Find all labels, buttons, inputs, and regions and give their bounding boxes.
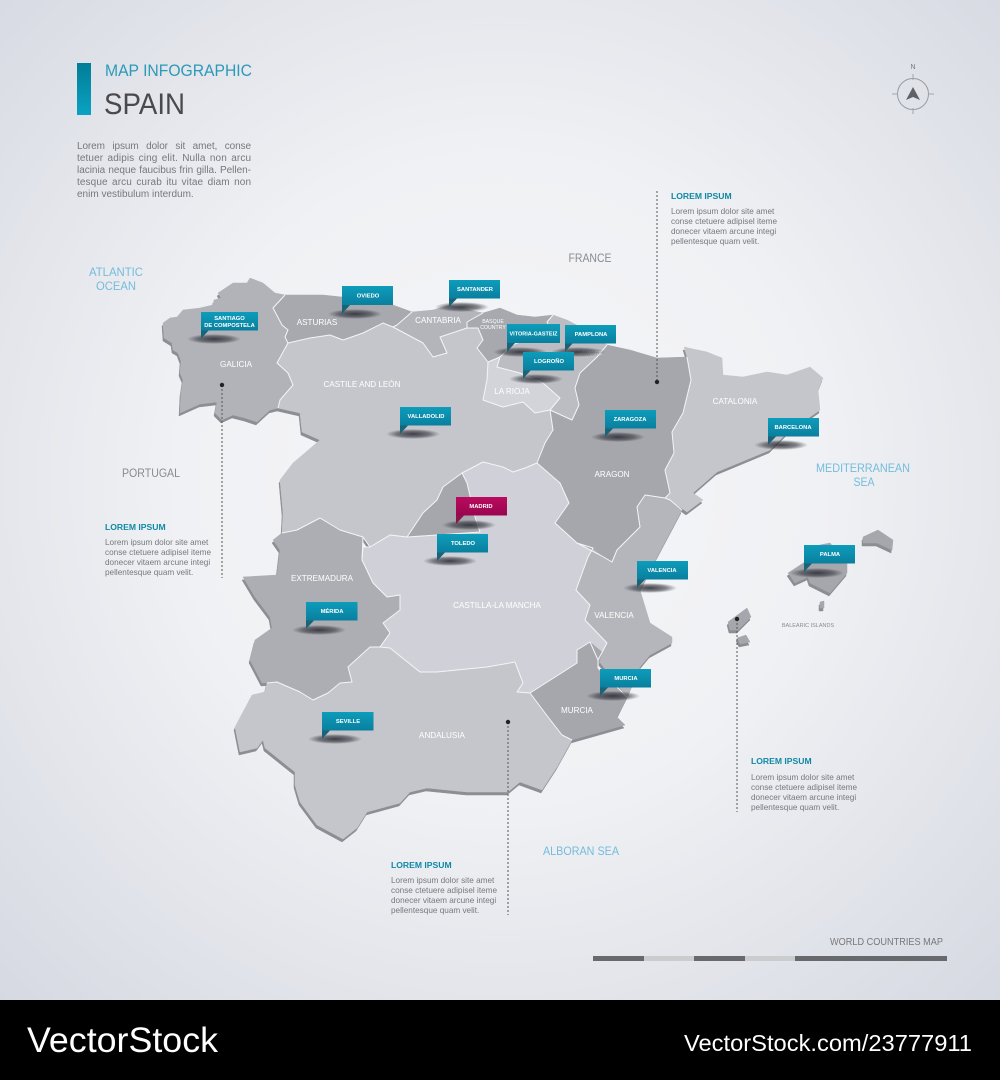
pin: Valladolid: VALLADOLID	[408, 414, 444, 420]
intro paragraph	[77, 141, 251, 200]
map of Spain	[163, 278, 893, 839]
pin: Oviedo: OVIEDO	[357, 294, 380, 300]
pin: Valladolid	[386, 407, 451, 439]
region labels: BASQUE	[482, 319, 504, 325]
pin: Santiago de Compostela	[187, 312, 258, 344]
icon: compass	[892, 64, 934, 114]
pin: Barcelona: BARCELONA	[774, 425, 812, 431]
callout: islands: LOREM IPSUM	[751, 756, 812, 766]
region: Murcia	[530, 642, 627, 740]
footer url: VectorStock.com/23777911	[684, 1030, 972, 1056]
callout: north-east	[655, 191, 777, 384]
callout: islands: Lorem ipsum dolor site amet	[751, 773, 855, 782]
region labels: CATALONIA	[713, 397, 758, 406]
region: Andalusia	[235, 647, 572, 839]
location pins	[187, 280, 855, 744]
pin: Oviedo	[328, 286, 393, 319]
pin: Zaragoza	[591, 410, 656, 442]
callout: north-east: conse ctetuere adipisel iteme	[671, 217, 777, 226]
callout: west: donecer vitaem arcune integi	[105, 558, 210, 567]
callout: south	[391, 720, 510, 915]
pin: Palma: PALMA	[820, 552, 841, 558]
region labels: LA RIOJA	[494, 387, 530, 396]
land regions	[163, 278, 893, 839]
pin: Seville: SEVILLE	[336, 719, 360, 725]
pin: Vitoria-Gasteiz: VITORIA-GASTEIZ	[510, 332, 558, 338]
region: Galicia	[163, 278, 293, 422]
pin: Valencia: VALENCIA	[647, 568, 677, 574]
callout: south: conse ctetuere adipisel iteme	[391, 886, 497, 895]
sea and country labels: ATLANTIC	[89, 267, 143, 279]
region: Asturias	[273, 295, 412, 343]
pin: Zaragoza: ZARAGOZA	[614, 417, 647, 423]
pin: Pamplona: PAMPLONA	[575, 332, 608, 338]
pin: Santander: SANTANDER	[457, 287, 494, 293]
intro paragraph: lacinia neque faucibus frin gilla. Pellen-	[77, 165, 251, 176]
callout: islands: pellentesque quam velit.	[751, 803, 839, 812]
footer band	[0, 1000, 1000, 1080]
pin: Toledo: TOLEDO	[451, 541, 476, 547]
intro paragraph: enim vestibulum interdum.	[77, 189, 194, 200]
pin: Merida	[292, 602, 358, 635]
sea and country labels	[89, 253, 910, 858]
callout: south: donecer vitaem arcune integi	[391, 896, 496, 905]
region labels: COUNTRY	[480, 325, 506, 331]
region labels: GALICIA	[220, 360, 253, 369]
pin: Madrid	[442, 497, 507, 530]
callout: south: pellentesque quam velit.	[391, 906, 479, 915]
region labels: VALENCIA	[594, 611, 634, 620]
region: Navarre	[497, 315, 607, 420]
sea and country labels: ALBORAN SEA	[543, 846, 619, 858]
region labels: ANDALUSIA	[419, 731, 466, 740]
callout: islands: conse ctetuere adipisel iteme	[751, 783, 857, 792]
pin: Santander	[435, 280, 500, 312]
region labels: ASTURIAS	[297, 318, 338, 327]
pin: Barcelona	[754, 418, 819, 450]
region: Ibiza	[728, 608, 751, 630]
callout: islands	[735, 617, 857, 812]
region: Valencia	[576, 495, 682, 697]
region: Formentera	[737, 635, 750, 644]
pin: Toledo	[423, 534, 488, 566]
pin: Valencia	[623, 561, 688, 593]
region: Aragon	[537, 345, 691, 562]
pin: Logrono: LOGROÑO	[534, 358, 564, 365]
callout: south: LOREM IPSUM	[391, 860, 452, 870]
region labels: CASTILLA-LA MANCHA	[453, 601, 541, 610]
sea and country labels: OCEAN	[96, 281, 136, 293]
pin: Murcia	[586, 669, 651, 701]
region: Extremadura	[243, 518, 400, 700]
scale bar	[593, 937, 947, 961]
region: Menorca	[863, 530, 893, 550]
callout: south: Lorem ipsum dolor site amet	[391, 876, 495, 885]
callout: west	[105, 383, 224, 578]
callout: west: pellentesque quam velit.	[105, 568, 193, 577]
callout: north-east: pellentesque quam velit.	[671, 237, 759, 246]
subtitle: MAP INFOGRAPHIC	[105, 62, 252, 80]
pin: Logrono	[509, 352, 574, 384]
region: Mallorca	[788, 543, 847, 593]
callout: islands: donecer vitaem arcune integi	[751, 793, 856, 802]
title: SPAIN	[104, 88, 185, 121]
intro paragraph: tesque arcu curab itu vitae diam non	[77, 177, 251, 188]
callout: north-east: LOREM IPSUM	[671, 191, 732, 201]
scale bar: WORLD COUNTRIES MAP	[830, 937, 943, 948]
sea and country labels: SEA	[854, 477, 875, 489]
callout: west: conse ctetuere adipisel iteme	[105, 548, 211, 557]
intro paragraph: Lorem ipsum dolor sit amet, conse	[77, 141, 251, 152]
title accent bar	[77, 63, 91, 115]
region: Basque Country	[467, 308, 553, 362]
region: Catalonia	[665, 347, 823, 512]
title block	[77, 62, 252, 121]
region: Cabrera	[820, 601, 824, 608]
region: Madrid	[407, 473, 480, 537]
region: Castilla-La Mancha	[362, 462, 607, 693]
sea and country labels: FRANCE	[568, 253, 612, 265]
region: La Rioja	[483, 357, 560, 413]
callout: north-east: Lorem ipsum dolor site amet	[671, 207, 775, 216]
region labels: MURCIA	[561, 706, 594, 715]
region labels: CANTABRIA	[415, 316, 461, 325]
callout: north-east: donecer vitaem arcune integi	[671, 227, 776, 236]
pin: Pamplona	[551, 325, 616, 357]
region: Castile and Leon	[277, 323, 553, 547]
callout: west: LOREM IPSUM	[105, 522, 166, 532]
region labels: NAVARRE	[578, 351, 603, 357]
region labels	[220, 316, 758, 740]
pin: Murcia: MURCIA	[614, 676, 638, 682]
sea and country labels: MEDITERRANEAN	[816, 463, 910, 475]
pin: Vitoria-Gasteiz	[493, 324, 560, 357]
callout: west: Lorem ipsum dolor site amet	[105, 538, 209, 547]
footer brand: VectorStock	[27, 1021, 219, 1060]
pin: Palma	[790, 545, 855, 578]
intro paragraph: tetuer adipis cing elit. Nulla non arcu	[77, 153, 251, 164]
sea and country labels: PORTUGAL	[122, 468, 181, 480]
pin: Merida: MÉRIDA	[321, 607, 344, 615]
region labels: EXTREMADURA	[291, 574, 354, 583]
pin: Santiago de Compostela: SANTIAGO	[214, 316, 245, 322]
region labels: ARAGON	[594, 470, 630, 479]
pin: Seville	[308, 712, 374, 744]
sea and country labels: BALEARIC ISLANDS	[782, 623, 834, 629]
icon: compass: N	[910, 64, 916, 71]
region labels: CASTILE AND LEÓN	[324, 380, 401, 389]
pin: Madrid: MADRID	[469, 504, 493, 510]
region: Cantabria	[393, 305, 483, 357]
pin: Santiago de Compostela: DE COMPOSTELA	[204, 323, 256, 329]
